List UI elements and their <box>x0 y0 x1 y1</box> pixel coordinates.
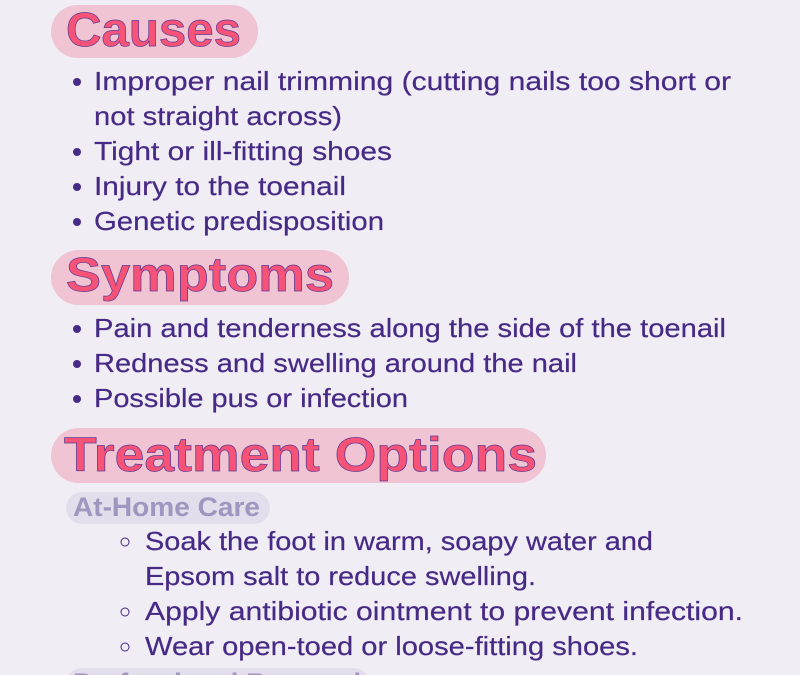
list: causes: Improper nail trimming (cutting nails too short or <box>94 66 731 96</box>
list: at-home care <box>121 526 743 661</box>
heading: Treatment Options: Treatment Options <box>64 429 537 482</box>
list: at-home care: Apply antibiotic ointment to prevent infection. <box>145 596 743 626</box>
list: at-home care: Epsom salt to reduce swelling. <box>145 561 536 591</box>
heading: Symptoms: Symptoms <box>66 249 334 302</box>
list: causes: Tight or ill-fitting shoes <box>94 136 392 166</box>
list: symptoms: Possible pus or infection <box>94 383 408 413</box>
panel: treatment options <box>51 428 743 675</box>
panel: causes <box>51 4 731 236</box>
list: causes <box>73 66 731 236</box>
list: symptoms <box>73 313 726 413</box>
list: causes: not straight across) <box>94 101 342 131</box>
list: causes: Genetic predisposition <box>94 206 384 236</box>
list: at-home care: Soak the foot in warm, soapy water and <box>145 526 653 556</box>
list: causes: Injury to the toenail <box>94 171 346 201</box>
panel: symptoms <box>51 249 726 413</box>
list: at-home care: Wear open-toed or loose-fitting shoes. <box>145 631 638 661</box>
list: symptoms: Pain and tenderness along the side of the toenail <box>94 313 726 343</box>
list: symptoms: Redness and swelling around the nail <box>94 348 577 378</box>
subheading: At-Home Care: At-Home Care <box>73 492 260 522</box>
heading: Causes: Causes <box>66 4 241 57</box>
